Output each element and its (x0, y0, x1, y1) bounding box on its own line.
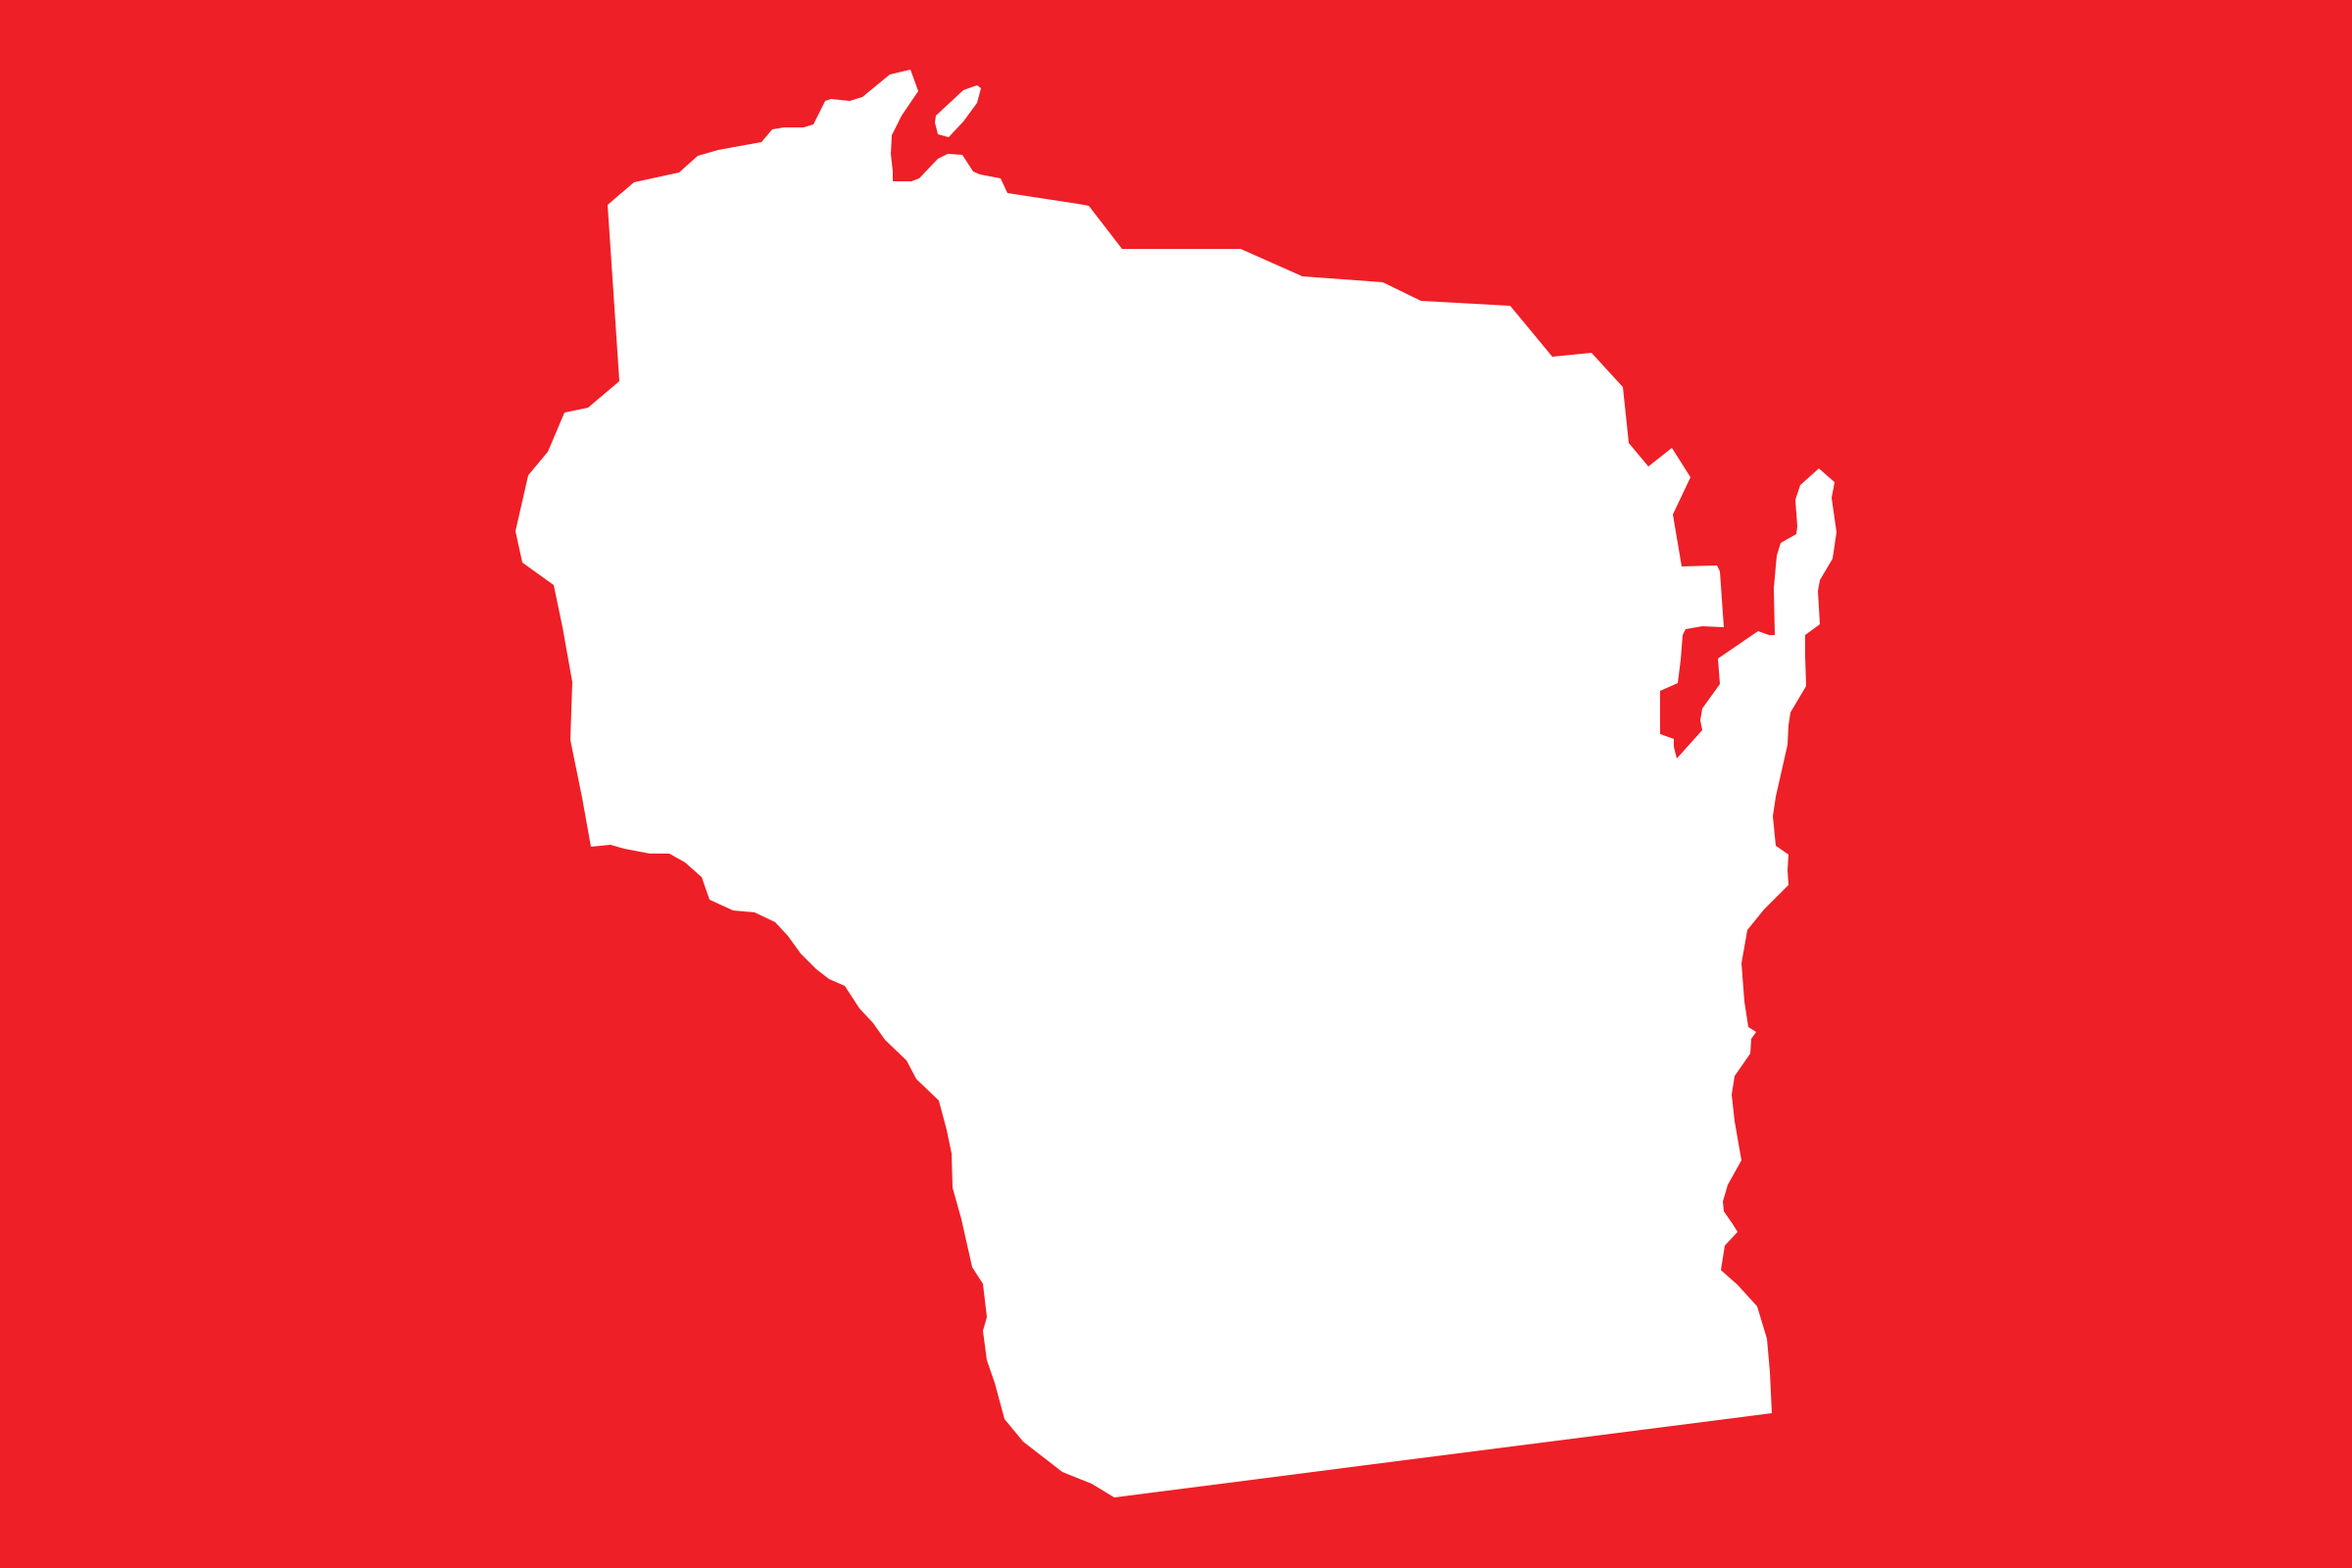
state mainland outline (515, 70, 1837, 1497)
icon: Wisconsin state map (515, 70, 1837, 1497)
Madeline Island (935, 85, 981, 137)
